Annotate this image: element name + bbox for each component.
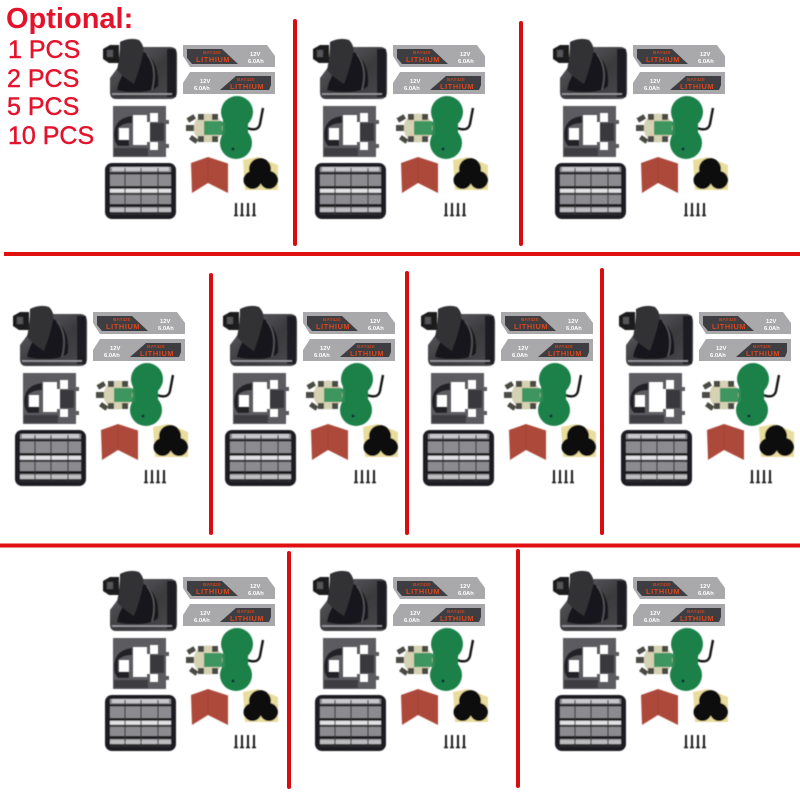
kit row 3 column 2: 12V bbox=[460, 584, 470, 590]
kit row 2 column 4: LITHIUM bbox=[712, 322, 746, 331]
kit row 1 column 2: BAT420 bbox=[413, 50, 431, 56]
kit row 3 column 3 bbox=[553, 571, 728, 751]
kit row 3 column 1: 12V bbox=[200, 611, 210, 617]
kit row 2 column 1: LITHIUM bbox=[106, 322, 140, 331]
kit row 3 column 2: BAT420 bbox=[447, 609, 465, 615]
kit row 2 column 1: LITHIUM bbox=[140, 349, 174, 358]
kit row 1 column 3: 6.0Ah bbox=[644, 86, 660, 92]
kit row 2 column 3: 6.0Ah bbox=[512, 353, 528, 359]
kit row 1 column 2: 12V bbox=[460, 52, 470, 58]
kit row 1 column 3 bbox=[553, 39, 728, 219]
kit row 2 column 1 bbox=[13, 306, 188, 486]
kit row 1 column 2: 6.0Ah bbox=[404, 86, 420, 92]
kit row 2 column 2: LITHIUM bbox=[316, 322, 350, 331]
kit row 3 column 3: BAT420 bbox=[687, 609, 705, 615]
kit row 3 column 3: 6.0Ah bbox=[698, 591, 714, 597]
quantity options list bbox=[7, 36, 94, 150]
kit row 1 column 3: BAT420 bbox=[653, 50, 671, 56]
kit row 1 column 3: LITHIUM bbox=[646, 55, 680, 64]
divider: row 2 first bbox=[209, 273, 213, 535]
divider: row 2 bottom bbox=[0, 544, 800, 548]
kit row 1 column 1: 12V bbox=[200, 79, 210, 85]
kit row 2 column 3: LITHIUM bbox=[514, 322, 548, 331]
kit row 1 column 3: LITHIUM bbox=[680, 82, 714, 91]
divider: row 1 left bbox=[293, 19, 297, 246]
divider: row 2 second bbox=[405, 271, 409, 535]
kit row 3 column 1 bbox=[103, 571, 278, 751]
kit row 3 column 3: 6.0Ah bbox=[644, 618, 660, 624]
kit row 1 column 1: 6.0Ah bbox=[194, 86, 210, 92]
kit row 2 column 4: BAT420 bbox=[753, 344, 771, 350]
quantity options list: 5 PCS bbox=[7, 93, 79, 121]
kit row 3 column 3: LITHIUM bbox=[680, 614, 714, 623]
kit row 3 column 3: BAT420 bbox=[653, 582, 671, 588]
kit row 3 column 1: 6.0Ah bbox=[248, 591, 264, 597]
kit row 3 column 1: BAT420 bbox=[203, 582, 221, 588]
kit row 3 column 3: LITHIUM bbox=[646, 587, 680, 596]
kit row 2 column 4: 6.0Ah bbox=[764, 326, 780, 332]
kit row 1 column 2: 6.0Ah bbox=[458, 59, 474, 65]
kit row 2 column 4: BAT420 bbox=[719, 317, 737, 323]
kit row 3 column 2: LITHIUM bbox=[406, 587, 440, 596]
kit row 1 column 2: LITHIUM bbox=[440, 82, 474, 91]
divider: row 1 bottom bbox=[4, 252, 800, 256]
quantity options list: 2 PCS bbox=[7, 65, 79, 93]
kit row 3 column 2: 12V bbox=[410, 611, 420, 617]
divider: row 3 right bbox=[516, 549, 520, 788]
kit row 1 column 2: BAT420 bbox=[447, 77, 465, 83]
kit row 1 column 1: BAT420 bbox=[203, 50, 221, 56]
kit row 2 column 1: BAT420 bbox=[113, 317, 131, 323]
kit row 2 column 2: 12V bbox=[320, 346, 330, 352]
kit row 3 column 1: 6.0Ah bbox=[194, 618, 210, 624]
kit row 2 column 3: 12V bbox=[568, 319, 578, 325]
kit row 2 column 1: 6.0Ah bbox=[158, 326, 174, 332]
kit row 3 column 3: 12V bbox=[700, 584, 710, 590]
kit row 2 column 2: BAT420 bbox=[357, 344, 375, 350]
kit row 1 column 2 bbox=[313, 39, 488, 219]
kit row 2 column 2: LITHIUM bbox=[350, 349, 384, 358]
kit row 3 column 2: LITHIUM bbox=[440, 614, 474, 623]
kit row 1 column 1: BAT420 bbox=[237, 77, 255, 83]
kit row 1 column 1: LITHIUM bbox=[196, 55, 230, 64]
kit row 2 column 2: 6.0Ah bbox=[314, 353, 330, 359]
kit row 2 column 2 bbox=[223, 306, 398, 486]
kit row 1 column 1 bbox=[103, 39, 278, 219]
kit row 2 column 3: BAT420 bbox=[555, 344, 573, 350]
kit row 2 column 3: LITHIUM bbox=[548, 349, 582, 358]
kit row 2 column 2: 6.0Ah bbox=[368, 326, 384, 332]
quantity options list: 10 PCS bbox=[8, 122, 94, 150]
kit row 1 column 3: 12V bbox=[650, 79, 660, 85]
kit row 2 column 3: 12V bbox=[518, 346, 528, 352]
kit row 2 column 4: 6.0Ah bbox=[710, 353, 726, 359]
kit row 2 column 3: BAT420 bbox=[521, 317, 539, 323]
kit row 1 column 1: 12V bbox=[250, 52, 260, 58]
kit row 1 column 2: 12V bbox=[410, 79, 420, 85]
kit row 3 column 1: BAT420 bbox=[237, 609, 255, 615]
kit row 2 column 1: 12V bbox=[110, 346, 120, 352]
kit row 1 column 2: LITHIUM bbox=[406, 55, 440, 64]
kit row 2 column 3: 6.0Ah bbox=[566, 326, 582, 332]
kit row 1 column 1: 6.0Ah bbox=[248, 59, 264, 65]
kit row 2 column 4: 12V bbox=[766, 319, 776, 325]
kit row 2 column 2: 12V bbox=[370, 319, 380, 325]
kit row 2 column 1: BAT420 bbox=[147, 344, 165, 350]
kit row 2 column 4 bbox=[619, 306, 794, 486]
heading: Optional: Optional: bbox=[6, 3, 133, 35]
divider: row 2 third bbox=[600, 268, 604, 535]
kit row 2 column 3 bbox=[421, 306, 596, 486]
kit row 1 column 3: 6.0Ah bbox=[698, 59, 714, 65]
kit row 3 column 1: LITHIUM bbox=[196, 587, 230, 596]
kit row 2 column 2: BAT420 bbox=[323, 317, 341, 323]
kit row 2 column 1: 6.0Ah bbox=[104, 353, 120, 359]
kit row 3 column 2: BAT420 bbox=[413, 582, 431, 588]
divider: row 1 right bbox=[519, 21, 523, 246]
kit row 3 column 3: 12V bbox=[650, 611, 660, 617]
kit row 1 column 1: LITHIUM bbox=[230, 82, 264, 91]
quantity options list: 1 PCS bbox=[8, 36, 80, 64]
kit row 3 column 2: 6.0Ah bbox=[404, 618, 420, 624]
kit row 3 column 2: 6.0Ah bbox=[458, 591, 474, 597]
kit row 1 column 3: 12V bbox=[700, 52, 710, 58]
kit row 3 column 2 bbox=[313, 571, 488, 751]
kit row 2 column 4: 12V bbox=[716, 346, 726, 352]
kit row 1 column 3: BAT420 bbox=[687, 77, 705, 83]
kit row 2 column 4: LITHIUM bbox=[746, 349, 780, 358]
divider: row 3 left bbox=[287, 551, 291, 789]
kit row 2 column 1: 12V bbox=[160, 319, 170, 325]
kit row 3 column 1: LITHIUM bbox=[230, 614, 264, 623]
kit row 3 column 1: 12V bbox=[250, 584, 260, 590]
